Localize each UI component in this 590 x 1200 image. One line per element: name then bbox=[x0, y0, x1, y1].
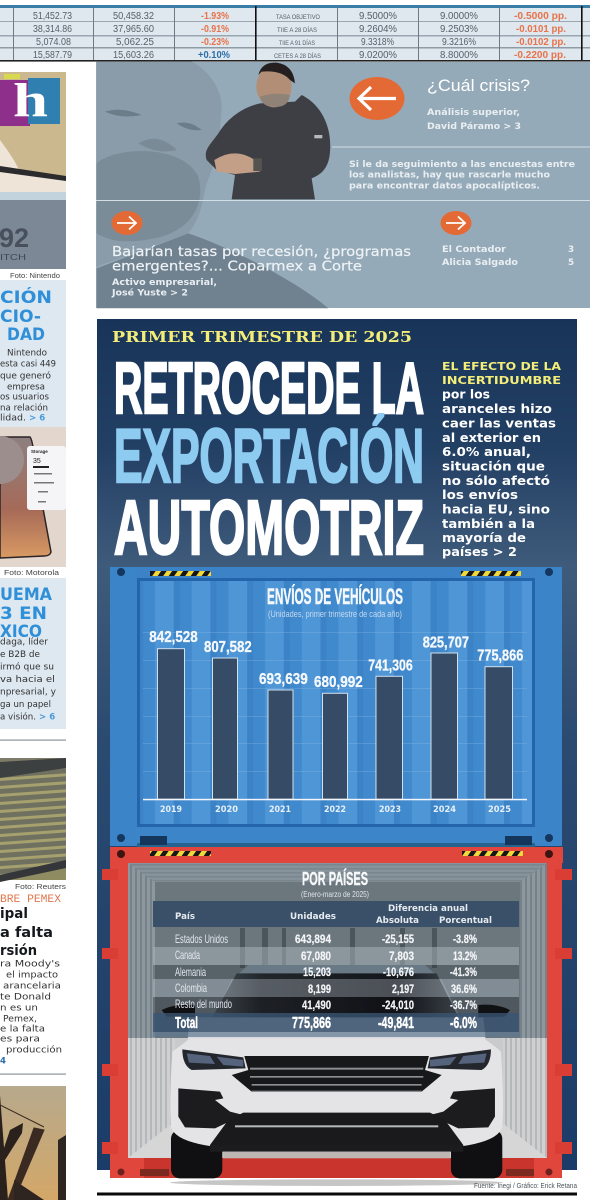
table header: Porcentual bbox=[439, 916, 492, 926]
left column: Motorola article bbox=[0, 578, 66, 729]
table: por países bbox=[153, 868, 519, 1037]
left column: Pemex article: te Donald bbox=[0, 992, 51, 1002]
intro text: INCERTIDUMBRE bbox=[442, 375, 561, 387]
left column: Motorola article: a visión. bbox=[0, 712, 36, 722]
markets table: 38,314.86 bbox=[33, 24, 72, 35]
bar chart: 2022 bbox=[324, 805, 346, 815]
table rows: 13.2% bbox=[453, 949, 477, 963]
bar chart: 775,866 bbox=[477, 648, 523, 665]
left column: Pemex article: arancelaria bbox=[3, 982, 61, 992]
intro text: mayoría de bbox=[442, 530, 526, 545]
left column: Motorola article: va hacia el bbox=[0, 675, 55, 685]
car bbox=[162, 965, 510, 1186]
text: column byline: David Páramo > 3 bbox=[427, 122, 521, 132]
table rows: -49,841 bbox=[378, 1015, 414, 1032]
left column: Nintendo article bbox=[0, 280, 66, 427]
markets table: CETES A 28 DÍAS bbox=[274, 51, 322, 60]
bar chart: 2024 bbox=[433, 805, 456, 815]
table header: Unidades bbox=[290, 912, 336, 922]
container interior bbox=[128, 863, 547, 1163]
bar chart: 2025 bbox=[488, 805, 511, 815]
markets table: 15,603.26 bbox=[113, 50, 154, 61]
headline: Coparmex: emergentes?... Coparmex a Corte bbox=[112, 260, 362, 274]
hazard stripes bbox=[150, 851, 523, 856]
markets table: 51,452.73 bbox=[33, 11, 72, 22]
table rows: Estados Unidos bbox=[175, 932, 228, 946]
red frame bbox=[102, 847, 572, 1178]
table rows: -41.3% bbox=[450, 965, 477, 979]
text: Activo empresarial byline: Activo empresarial, bbox=[112, 278, 217, 288]
table rows: 67,080 bbox=[301, 949, 331, 963]
caption: Reuters: Foto: Reuters bbox=[15, 882, 66, 891]
text: quote: los analistas, hay que rascarle mucho bbox=[349, 170, 550, 180]
markets table: 9.3216% bbox=[442, 37, 476, 48]
table header: Absoluta bbox=[376, 916, 419, 926]
bar chart: 825,707 bbox=[423, 634, 469, 651]
left column: Nintendo article: os usuarios bbox=[0, 392, 50, 402]
table rows: Alemania bbox=[175, 965, 206, 979]
markets table: -0.0101 pp. bbox=[516, 23, 566, 35]
markets table: -1.93% bbox=[201, 10, 230, 22]
left column: Motorola article: daga, líder bbox=[0, 638, 48, 648]
intro text: aranceles hizo bbox=[442, 401, 552, 416]
bar chart: 693,639 bbox=[259, 671, 308, 688]
text: index of columns: El Contador bbox=[442, 245, 507, 255]
text: column byline: Análisis superior, bbox=[427, 108, 520, 118]
text: quote bbox=[349, 160, 575, 192]
table rows: -10,676 bbox=[383, 965, 414, 979]
panel: main infographic bbox=[97, 319, 577, 1186]
bar chart bbox=[143, 629, 527, 815]
markets table: TASA OBJETIVO bbox=[276, 14, 320, 21]
left column: Motorola image: Storage bbox=[31, 449, 48, 454]
markets table: 9.2604% bbox=[359, 24, 397, 35]
panel: opinion bbox=[96, 62, 590, 308]
left column: Nintendo article: lidad. bbox=[0, 414, 26, 424]
icon: large orange arrow bbox=[350, 77, 404, 120]
left column: Nintendo article: esta casi 449 bbox=[0, 360, 56, 370]
bar chart: 2023 bbox=[379, 805, 401, 815]
intro text: EL EFECTO DE LA bbox=[442, 361, 562, 373]
left column: Motorola article: irmó que su bbox=[0, 662, 54, 672]
bar chart: 2021 bbox=[269, 805, 291, 815]
markets table: 15,587.79 bbox=[33, 50, 72, 61]
markets table: TIIE A 28 DÍAS bbox=[277, 25, 318, 34]
left column: Pemex article: 4 bbox=[0, 1056, 6, 1066]
table rows: Total bbox=[175, 1015, 198, 1032]
text: Activo empresarial byline bbox=[111, 278, 217, 298]
hazard stripes bbox=[150, 571, 521, 576]
caption: Motorola: Foto: Motorola bbox=[4, 568, 60, 577]
intro text: también a la bbox=[442, 516, 535, 531]
left column: Pemex article: BRE PEMEX bbox=[0, 894, 61, 906]
bar chart: 2019 bbox=[160, 805, 182, 815]
markets table: -0.91% bbox=[201, 23, 230, 35]
left column: Pemex article: rsión bbox=[0, 943, 37, 959]
left column: Motorola image bbox=[0, 427, 66, 567]
text: index of columns: 3 bbox=[568, 245, 574, 255]
markets table: -0.5000 pp. bbox=[514, 10, 567, 22]
intro text: los envíos bbox=[442, 487, 518, 502]
section subtitle: (Enero-marzo de 2025) bbox=[301, 890, 369, 899]
left column: Nintendo article: DAD bbox=[7, 325, 45, 345]
markets table: 37,965.60 bbox=[113, 24, 154, 35]
icon: small arrow right bbox=[440, 211, 472, 235]
left column: Motorola article: XICO bbox=[0, 622, 42, 642]
intro text: 6.0% anual, bbox=[442, 444, 531, 459]
markets table: TIIE A 91 DÍAS bbox=[279, 38, 316, 47]
markets table: -0.23% bbox=[201, 36, 230, 48]
left column: Motorola article: 3 EN bbox=[0, 604, 47, 624]
markets table: 9.0000% bbox=[440, 11, 478, 22]
table header: Diferencia anual bbox=[388, 904, 468, 914]
left column: Pemex article: Pemex, bbox=[3, 1014, 37, 1024]
table rows: Canada bbox=[175, 948, 200, 962]
table rows: 8,199 bbox=[308, 982, 331, 996]
dividers bbox=[96, 146, 590, 201]
markets table bbox=[0, 5, 590, 62]
intro text: caer las ventas bbox=[442, 416, 556, 430]
table rows bbox=[175, 932, 477, 1032]
icon: small arrow left bbox=[112, 211, 142, 235]
bar chart: 842,528 bbox=[149, 629, 198, 646]
left column: Pemex article: ra Moody's bbox=[0, 960, 61, 970]
left column: Nintendo article: > 6 bbox=[29, 414, 45, 424]
intro text: situación que bbox=[442, 458, 545, 474]
table header bbox=[175, 904, 492, 926]
chart subtitle: (Unidades, primer trimestre de cada año) bbox=[268, 609, 402, 620]
markets table: 5,074.08 bbox=[36, 37, 71, 48]
table rows: -36.7% bbox=[450, 998, 477, 1012]
left column: Motorola image: 35 bbox=[33, 458, 41, 465]
intro text: países > 2 bbox=[442, 544, 517, 559]
headline: Coparmex bbox=[112, 245, 411, 274]
left column: Nintendo image bbox=[0, 200, 66, 269]
markets table: 9.5000% bbox=[359, 11, 397, 22]
markets table: -0.2200 pp. bbox=[514, 49, 566, 61]
left column: Motorola article: npresarial, y bbox=[0, 688, 56, 698]
left column: Pemex article bbox=[0, 894, 62, 1066]
left column: Motorola article: UEMA bbox=[0, 585, 53, 605]
headline: Coparmex: Bajarían tasas por recesión, ¿programas bbox=[112, 245, 411, 260]
left column: Pemex article: a falta bbox=[0, 925, 53, 941]
bar chart: 680,992 bbox=[314, 674, 363, 691]
kicker: PRIMER TRIMESTRE DE 2025 bbox=[112, 328, 412, 346]
left column: Motorola article: > 6 bbox=[39, 712, 55, 722]
left column: Hacker image bbox=[0, 72, 66, 200]
left column: Nintendo image: ITCH bbox=[0, 253, 26, 262]
table rows: -24,010 bbox=[382, 998, 414, 1012]
table rows: Resto del mundo bbox=[175, 997, 232, 1011]
text: index of columns: Alicia Salgado bbox=[442, 258, 518, 268]
intro text bbox=[442, 361, 562, 559]
markets table: 5,062.25 bbox=[116, 37, 154, 48]
container: blue with bar chart bbox=[110, 567, 562, 848]
caption: Nintendo: Foto: Nintendo bbox=[10, 271, 60, 280]
left column: Nintendo article: CIÓN bbox=[0, 286, 52, 308]
table header: País bbox=[175, 912, 195, 922]
markets table: 9.0200% bbox=[359, 50, 397, 61]
left column: Pemex article: es para bbox=[0, 1034, 40, 1044]
bar chart: 741,306 bbox=[368, 658, 413, 675]
markets table: -0.0102 pp. bbox=[516, 36, 566, 48]
intro text: hacia EU, sino bbox=[442, 502, 550, 516]
left column: Nintendo article: empresa bbox=[7, 382, 45, 392]
markets table: 50,458.32 bbox=[113, 11, 154, 22]
table rows: 2,197 bbox=[392, 982, 414, 996]
table rows: 15,203 bbox=[303, 965, 331, 979]
person bbox=[206, 63, 330, 199]
table rows: 775,866 bbox=[292, 1015, 331, 1032]
bar chart: 2020 bbox=[215, 805, 238, 815]
text: index of columns: 5 bbox=[568, 258, 574, 268]
table rows: Colombia bbox=[175, 981, 207, 995]
text: quote: Si le da seguimiento a las encuestas entre bbox=[349, 160, 575, 170]
left column: Nintendo article: Nintendo bbox=[7, 348, 47, 358]
chart title: ENVÍOS DE VEHÍCULOS bbox=[267, 584, 403, 609]
portrait background: large face bbox=[97, 62, 328, 308]
title bbox=[114, 349, 424, 571]
heading: ¿Cuál crisis?: ¿Cuál crisis? bbox=[427, 76, 530, 95]
markets table: +0.10% bbox=[198, 49, 231, 61]
text: column byline bbox=[427, 108, 521, 132]
intro text: por los bbox=[442, 386, 490, 402]
left column: Pemex article: e la falta bbox=[0, 1024, 45, 1034]
left column: Pemex article: ipal bbox=[0, 906, 28, 922]
markets table: 9.3318% bbox=[361, 37, 394, 48]
left column: cranes image bbox=[0, 1086, 66, 1200]
left column: Motorola article: e B2B de bbox=[0, 650, 40, 660]
text: quote: para encontrar datos apocalípticos. bbox=[349, 182, 540, 192]
container: red with country table and car bbox=[102, 847, 572, 1186]
intro text: al exterior en bbox=[442, 430, 541, 445]
left column: Hacker image: h bbox=[13, 74, 48, 127]
left column: Pemex article: n es un bbox=[0, 1004, 38, 1014]
table rows: 41,490 bbox=[302, 998, 331, 1012]
left column: Motorola article: ga un papel bbox=[0, 700, 51, 710]
markets table: 9.2503% bbox=[440, 24, 478, 35]
left column: Nintendo article: CIO- bbox=[0, 307, 41, 327]
text: index of columns bbox=[442, 245, 574, 268]
left column: Pemex article: producción bbox=[6, 1044, 62, 1056]
table rows: 643,894 bbox=[295, 932, 331, 946]
intro text: no sólo afectó bbox=[442, 473, 550, 488]
table rows: -3.8% bbox=[453, 932, 477, 946]
section title: POR PAÍSES bbox=[302, 868, 368, 889]
left column: Pemex article: el impacto bbox=[6, 970, 58, 980]
left column: Reuters building image bbox=[0, 758, 66, 882]
table rows: -25,155 bbox=[382, 932, 414, 946]
table rows: 36.6% bbox=[451, 982, 477, 996]
left column: Nintendo article: na relación bbox=[0, 402, 48, 414]
table rows: -6.0% bbox=[450, 1015, 477, 1032]
text: Activo empresarial byline: José Yuste > 2 bbox=[111, 288, 188, 298]
markets table: 8.8000% bbox=[440, 50, 478, 61]
left column: Nintendo article: que generó bbox=[0, 370, 51, 382]
table rows: 7,803 bbox=[389, 949, 414, 963]
bar chart: 807,582 bbox=[204, 639, 252, 656]
